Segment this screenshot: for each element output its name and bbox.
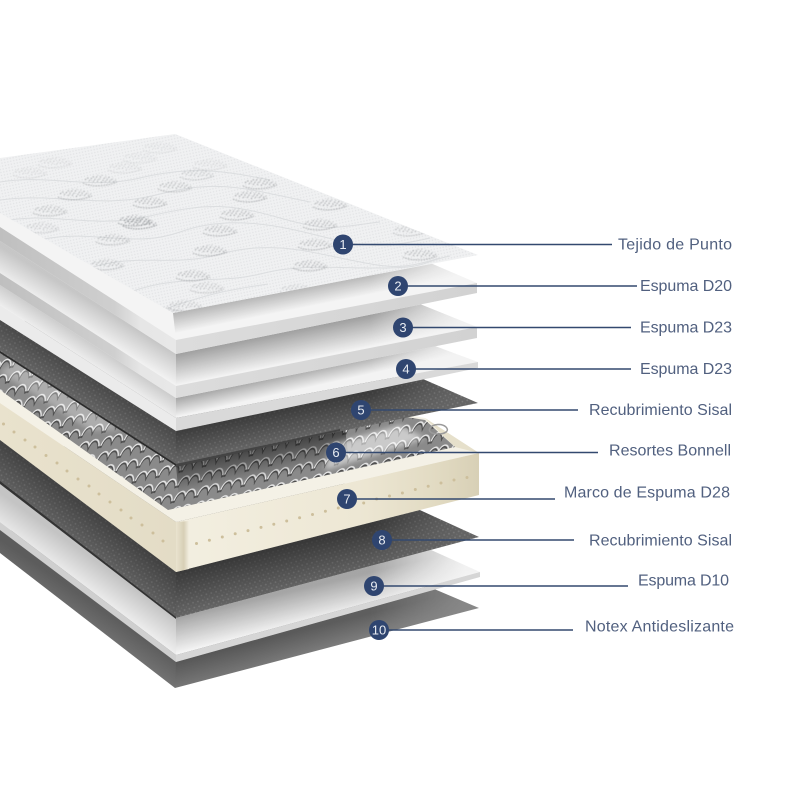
callout 10: Notex Antideslizante: Notex Antideslizante bbox=[585, 618, 734, 636]
layer 4: foam D23 bbox=[0, 285, 478, 431]
callout 8: Recubrimiento Sisal: 8 bbox=[378, 532, 386, 548]
callout 2: Espuma D20 bbox=[388, 276, 732, 296]
callout 9: Espuma D10: Espuma D10 bbox=[638, 572, 729, 590]
quilting wave lines bbox=[0, 171, 450, 308]
callout 5: Recubrimiento Sisal: Recubrimiento Sisal bbox=[589, 402, 732, 419]
callout 5: Recubrimiento Sisal: 5 bbox=[357, 402, 365, 418]
callout 8: Recubrimiento Sisal bbox=[372, 530, 732, 550]
layer 1: knit fabric bbox=[0, 134, 478, 317]
callout 9: Espuma D10: 9 bbox=[370, 578, 378, 594]
callout 1: Tejido de Punto: Tejido de Punto bbox=[618, 236, 732, 254]
callout 4: Espuma D23 bbox=[396, 359, 732, 379]
callout 8: Recubrimiento Sisal: Recubrimiento Sisal bbox=[589, 532, 732, 550]
callout 1: Tejido de Punto bbox=[333, 234, 732, 254]
layer 6: Bonnell springs bbox=[0, 340, 455, 510]
layer 10: notex anti-slip bbox=[0, 530, 480, 688]
callout 2: Espuma D20: Espuma D20 bbox=[640, 278, 732, 295]
callout 6: Resortes Bonnell bbox=[326, 442, 731, 462]
callout 2: Espuma D20: 2 bbox=[394, 278, 402, 294]
callout 10: Notex Antideslizante: 10 bbox=[372, 622, 386, 638]
layer 5: sisal cover bbox=[0, 320, 478, 467]
callout 6: Resortes Bonnell: 6 bbox=[332, 445, 340, 460]
mattress exploded layers bbox=[0, 134, 480, 688]
layer 8: sisal cover bbox=[0, 440, 479, 619]
layer 9: foam D10 bbox=[0, 470, 480, 662]
callout 7: Marco de Espuma D28 bbox=[337, 484, 730, 509]
callout 3: Espuma D23 bbox=[393, 318, 732, 338]
quilted pattern patches bbox=[13, 142, 437, 317]
layer 7: D28 foam frame bbox=[0, 350, 479, 572]
callout 1: Tejido de Punto: 1 bbox=[339, 237, 347, 252]
callout 4: Espuma D23: 4 bbox=[402, 362, 410, 376]
frame perforation dots: front side bbox=[195, 476, 468, 545]
layer 2: foam D20 bbox=[0, 227, 477, 354]
frame perforation dots: left side bbox=[2, 422, 164, 542]
callout 9: Espuma D10 bbox=[364, 572, 729, 596]
callout 7: Marco de Espuma D28: Marco de Espuma D28 bbox=[564, 484, 730, 502]
callout 5: Recubrimiento Sisal bbox=[351, 400, 732, 420]
callout 7: Marco de Espuma D28: 7 bbox=[343, 492, 351, 506]
callout 3: Espuma D23: 3 bbox=[399, 320, 407, 335]
callout 6: Resortes Bonnell: Resortes Bonnell bbox=[609, 442, 731, 460]
callout 10: Notex Antideslizante bbox=[369, 618, 734, 640]
callout 3: Espuma D23: Espuma D23 bbox=[640, 320, 732, 336]
callout 4: Espuma D23: Espuma D23 bbox=[640, 361, 732, 378]
layer 3: foam D23 bbox=[0, 241, 477, 398]
